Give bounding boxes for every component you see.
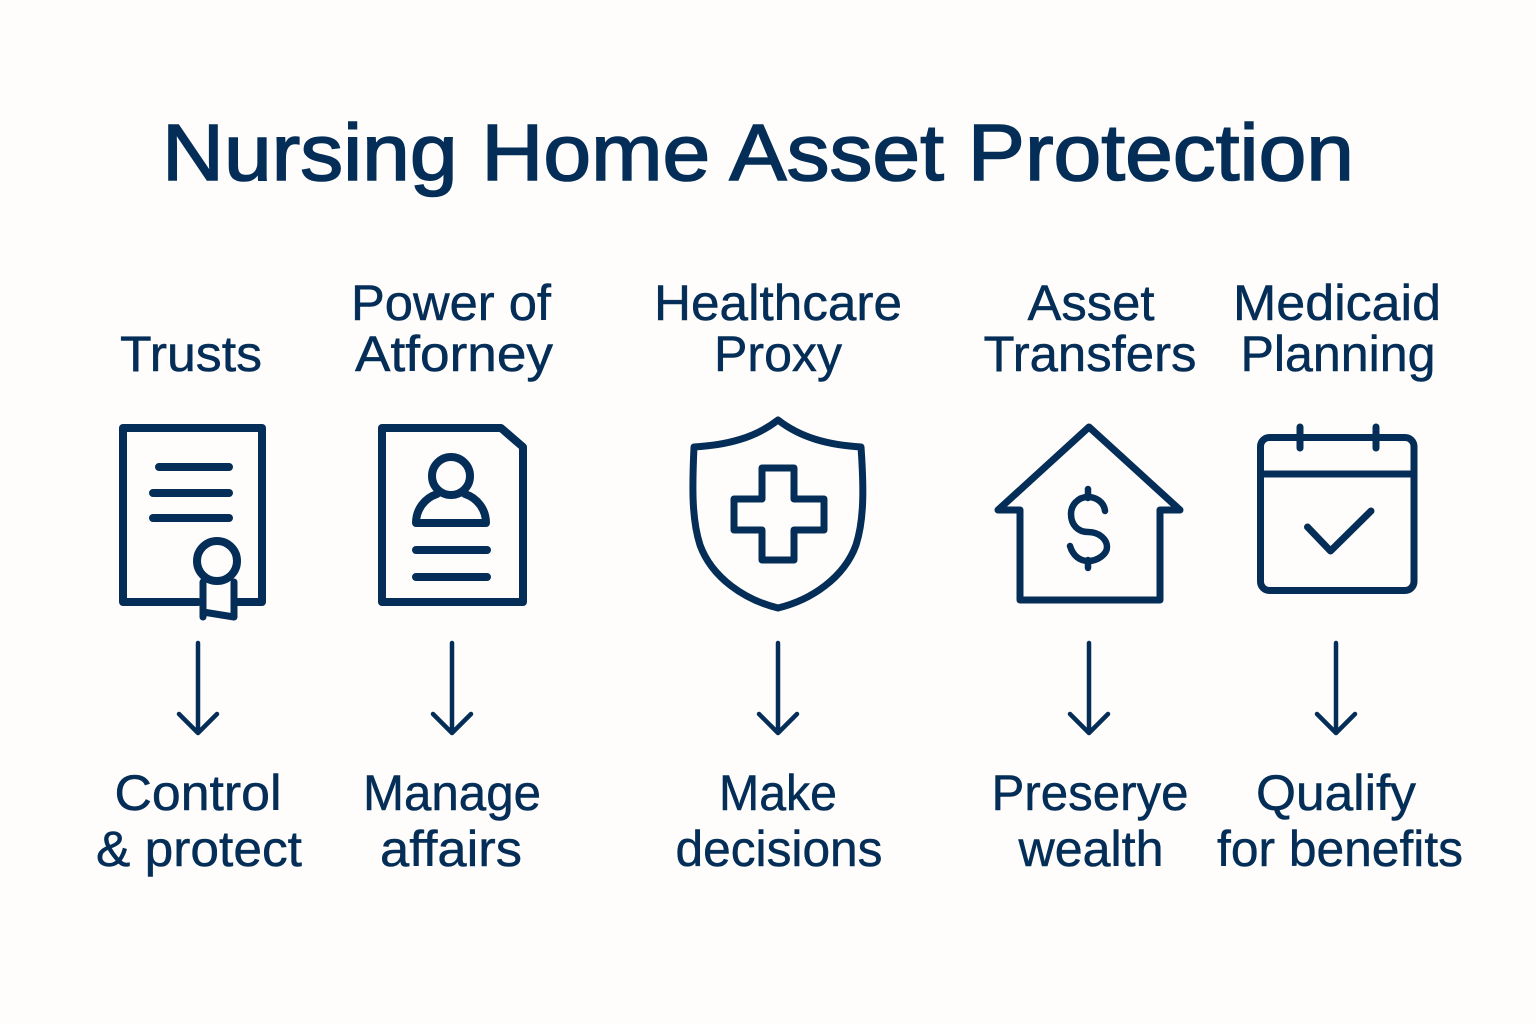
heading: Healthcare Proxy: Proxy <box>714 326 842 382</box>
outcome: Manage affairs: affairs <box>380 821 522 877</box>
heading: Asset Transfers: Asset <box>1028 275 1155 331</box>
icon: person document <box>382 428 523 602</box>
title: Nursing Home Asset Protection <box>162 108 1354 197</box>
heading: Power of Attorney: Atforney <box>355 326 553 382</box>
column: Power of Attorney <box>351 275 553 877</box>
heading: Asset Transfers <box>984 275 1196 382</box>
heading: Medicaid Planning: Planning <box>1240 326 1436 382</box>
outcome: Control & protect: & protect <box>96 821 302 877</box>
outcome: Control & protect <box>96 765 302 877</box>
column: Healthcare Proxy <box>654 275 902 877</box>
heading: Healthcare Proxy: Healthcare <box>654 275 902 331</box>
outcome: Manage affairs <box>363 765 541 877</box>
column: Asset Transfers <box>984 275 1196 877</box>
heading: Asset Transfers: Transfers <box>984 326 1196 382</box>
outcome: Make decisions: Make <box>719 765 837 821</box>
arrow: Trusts to outcome <box>179 643 217 733</box>
heading: Power of Attorney: Power of <box>351 275 551 331</box>
arrow: Medicaid Planning to outcome <box>1317 643 1355 733</box>
heading: Medicaid Planning: Medicaid <box>1233 275 1441 331</box>
outcome: Manage affairs: Manage <box>363 765 541 821</box>
outcome: Make decisions <box>676 765 882 877</box>
outcome: Qualify for benefits <box>1217 765 1463 877</box>
icon: house with dollar <box>998 427 1180 600</box>
outcome: Make decisions: decisions <box>676 821 882 877</box>
arrow: Power of Attorney to outcome <box>433 643 471 733</box>
outcome: Qualify for benefits: for benefits <box>1217 821 1463 877</box>
heading: Power of Attorney <box>351 275 553 382</box>
outcome: Preserve wealth: Preserye <box>992 765 1188 821</box>
arrow: Asset Transfers to outcome <box>1070 643 1108 733</box>
icon: certificate document <box>123 428 262 617</box>
outcome: Control & protect: Control <box>114 765 282 821</box>
outcome: Preserve wealth: wealth <box>1017 821 1164 877</box>
outcome: Qualify for benefits: Qualify <box>1256 765 1416 821</box>
arrow: Healthcare Proxy to outcome <box>759 643 797 733</box>
icon: calendar with check <box>1260 427 1414 590</box>
heading: Healthcare Proxy <box>654 275 902 382</box>
outcome: Preserve wealth <box>992 765 1188 877</box>
icon: medical shield <box>693 420 863 608</box>
column: Trusts <box>96 326 302 877</box>
column: Medicaid Planning <box>1217 275 1463 877</box>
heading: Trusts: Trusts <box>120 326 262 382</box>
heading: Medicaid Planning <box>1233 275 1441 382</box>
